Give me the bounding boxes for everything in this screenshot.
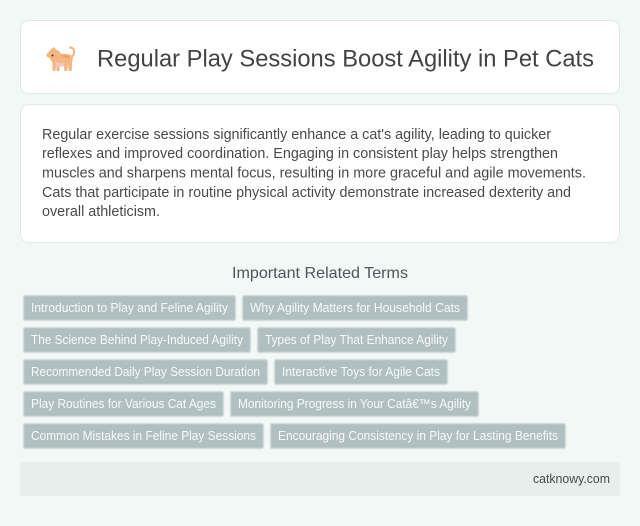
footer <box>20 462 620 496</box>
tag: science <box>24 328 250 352</box>
tag: mistakes <box>24 424 264 448</box>
heading: related terms: Important Related Terms <box>232 265 408 282</box>
text block: description: overall athleticism. <box>42 204 160 220</box>
tag: consistency: Encouraging Consistency in Play for Lasting Benefits <box>278 429 558 443</box>
text block: description: Regular exercise sessions significantly enhance a cat's agility, leading to quicker <box>42 127 551 143</box>
tag: introduction <box>24 296 236 320</box>
tag: monitoring <box>230 392 478 416</box>
tag: types of play <box>258 328 456 352</box>
footer source text: catknowy.com <box>533 472 610 486</box>
tag: interactive toys: Interactive Toys for Agile Cats <box>282 365 440 379</box>
text block: description: Cats that participate in routine physical activity demonstrate increased dexterity and <box>42 185 571 201</box>
icon: orange cat <box>46 47 74 71</box>
tag: monitoring: Monitoring Progress in Your Catâ€™s Agility <box>238 397 472 411</box>
tag: science: The Science Behind Play-Induced Agility <box>31 333 244 347</box>
tag: routines: Play Routines for Various Cat Ages <box>31 397 216 411</box>
tag: interactive toys <box>274 360 448 384</box>
tag: consistency <box>270 424 566 448</box>
tag: mistakes: Common Mistakes in Feline Play Sessions <box>31 429 256 443</box>
text block: description <box>42 127 586 220</box>
tag: why agility matters: Why Agility Matters for Household Cats <box>250 301 460 315</box>
text block: description: reflexes and improved coordination. Engaging in consistent play helps strengthen <box>42 146 558 162</box>
tag: daily duration: Recommended Daily Play Session Duration <box>31 365 260 379</box>
text block: description: muscles and sharpens mental focus, resulting in more graceful and agile movements. <box>42 166 586 182</box>
panel: description <box>20 104 620 242</box>
tag: routines <box>24 392 224 416</box>
tag: types of play: Types of Play That Enhance Agility <box>265 333 449 347</box>
tag: daily duration <box>24 360 268 384</box>
tag: why agility matters <box>242 296 468 320</box>
panel: related term tags <box>24 296 566 448</box>
tag: introduction: Introduction to Play and Feline Agility <box>31 301 229 315</box>
title: Regular Play Sessions Boost Agility in Pet Cats <box>97 46 594 72</box>
panel: title card <box>20 20 620 94</box>
